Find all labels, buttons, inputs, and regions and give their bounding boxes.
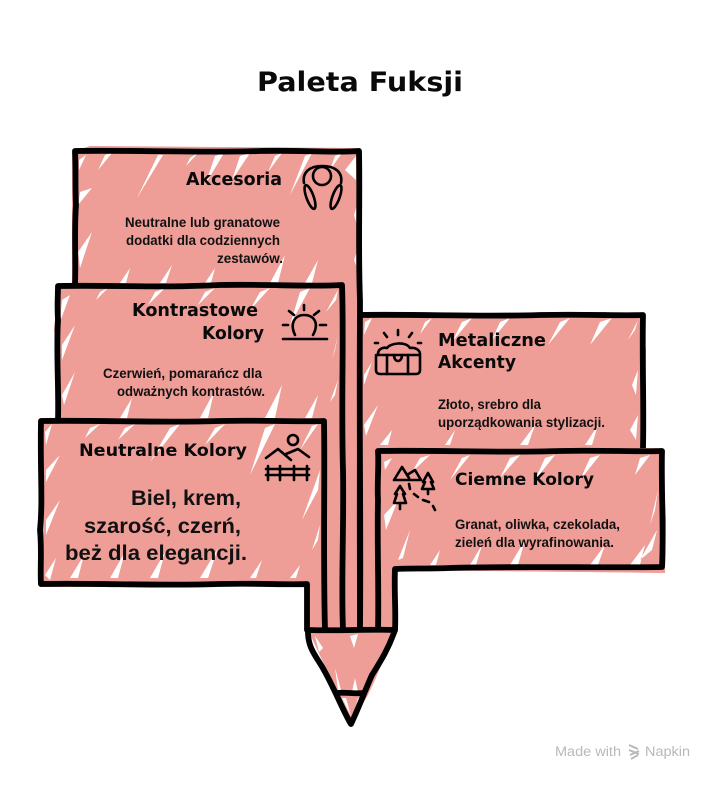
text: Neutralne description: beż dla elegancji.: [65, 541, 247, 565]
heading: Neutralne Kolory: Neutralne Kolory: [79, 441, 247, 461]
panel: Akcesoria: [72, 146, 362, 630]
text: Neutralne description: Biel, krem,: [131, 486, 241, 510]
text: Kontrastowe description: Czerwień, pomarańcz dla: [103, 366, 262, 381]
icon: treasure chest: [375, 330, 421, 374]
icon: sunrise: [283, 305, 327, 339]
pencil tip: [308, 630, 396, 724]
icon: landscape with fence: [266, 435, 309, 480]
text: Metaliczne description: uporządkowania stylizacji.: [438, 415, 605, 430]
text: Ciemne description: zieleń dla wyrafinowania.: [455, 535, 614, 550]
heading: Kontrastowe Kolory: Kontrastowe: [132, 300, 258, 321]
heading: Kontrastowe Kolory: Kolory: [202, 323, 264, 344]
text: Neutralne description: szarość, czerń,: [84, 514, 241, 538]
text: Akcesoria description: Neutralne lub granatowe: [125, 215, 280, 230]
panel: Kontrastowe Kolory: [54, 284, 344, 630]
panel: Ciemne Kolory: [376, 448, 666, 630]
text: Akcesoria description: zestawów.: [217, 251, 283, 266]
text: Akcesoria description: dodatki dla codziennych: [126, 233, 280, 248]
heading: Akcesoria: Akcesoria: [186, 169, 282, 190]
panel: Metaliczne Akcenty: [358, 314, 646, 630]
panel: Neutralne Kolory: [38, 418, 327, 630]
heading: Metaliczne Akcenty: Metaliczne: [438, 330, 546, 351]
icon: mountains and trees: [394, 467, 435, 510]
icon: necklace: [302, 166, 344, 210]
heading: Metaliczne Akcenty: Akcenty: [438, 352, 516, 373]
footer: Made with Napkin: Made with: [555, 744, 621, 759]
title: Paleta Fuksji: [257, 67, 463, 98]
text: Ciemne description: Granat, oliwka, czekolada,: [455, 517, 620, 532]
footer: Made with Napkin: Napkin: [645, 744, 690, 759]
text: Kontrastowe description: odważnych kontrastów.: [117, 384, 265, 399]
text: Metaliczne description: Złoto, srebro dla: [438, 397, 541, 412]
heading: Ciemne Kolory: Ciemne Kolory: [455, 470, 594, 490]
footer: Made with Napkin: [555, 744, 690, 759]
